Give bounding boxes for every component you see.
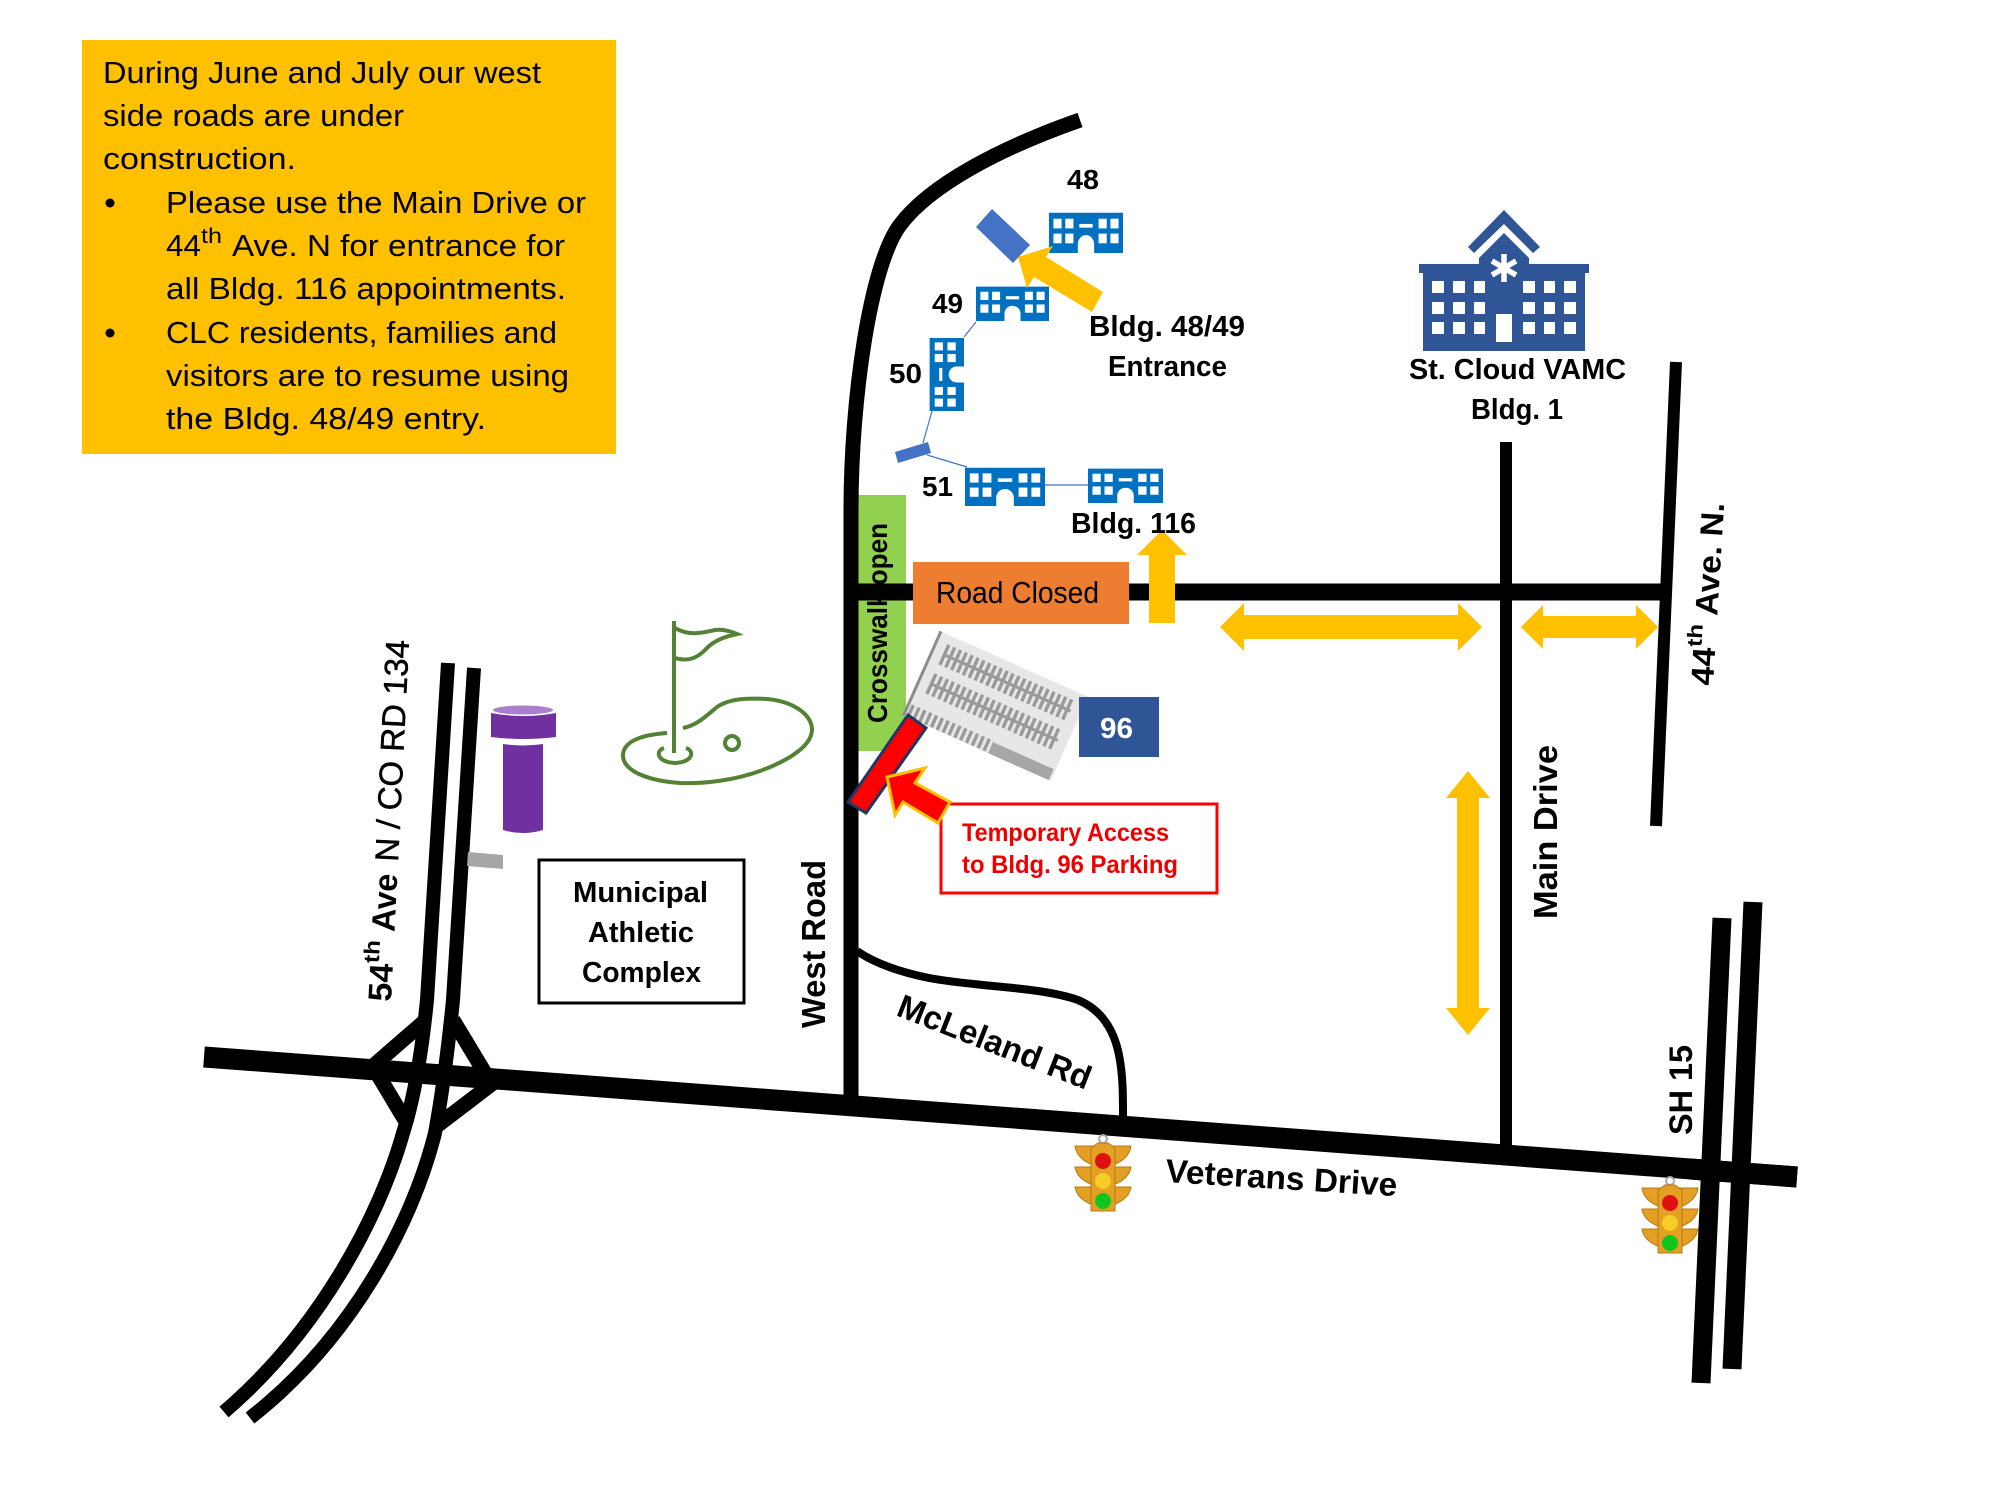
- label: 48: 48: [1067, 164, 1099, 195]
- arrow: Bldg. 48/49 entrance: [1018, 246, 1103, 312]
- label: Veterans Drive: Veterans Drive: [1165, 1152, 1398, 1203]
- box: Municipal Athletic Complex: [539, 860, 744, 1003]
- label: Bldg. 48/49 Entrance: Bldg. 48/49: [1089, 311, 1245, 343]
- road closed sign: Road Closed: [936, 575, 1099, 610]
- icon: building 116: [1088, 469, 1163, 503]
- temporary access road: [848, 715, 926, 813]
- icon: St. Cloud VAMC hospital: [1419, 210, 1589, 351]
- road: closed connector to 44th Ave: [851, 584, 1668, 600]
- label: McLeland Rd: McLeland Rd: [892, 987, 1097, 1096]
- panel: construction notice: Ave. N for entrance for: [232, 228, 565, 263]
- icon: golf course: [623, 621, 812, 783]
- gray access stub: [467, 852, 503, 869]
- panel: construction notice: CLC residents, families and: [166, 315, 557, 350]
- road: Veterans Drive: [204, 1057, 1797, 1177]
- road: 44th Ave N: [1656, 362, 1676, 826]
- label: 54th Ave N / CO RD 134: N / CO RD 134: [368, 639, 416, 863]
- label: 44th Ave. N.: 44: [1684, 646, 1722, 686]
- panel: construction notice: visitors are to resume using: [166, 358, 569, 393]
- icon: water tower: [491, 706, 556, 833]
- callout: temporary access to Bldg. 96 parking: Temporary Access: [962, 819, 1169, 847]
- road: SH 15: [1701, 902, 1753, 1383]
- box: Municipal Athletic Complex: Athletic: [588, 917, 694, 949]
- entrance marker: Bldg. 50/51: [895, 442, 931, 463]
- icon: building 51: [965, 468, 1045, 506]
- panel: construction notice: the Bldg. 48/49 entry.: [166, 401, 486, 436]
- label: 51: 51: [922, 471, 953, 502]
- label: Bldg. 48/49 Entrance: [1089, 311, 1245, 383]
- icon: traffic light on Veterans Drive: [1075, 1135, 1131, 1211]
- label: Main Drive: Main Drive: [1527, 745, 1564, 919]
- callout: temporary access to Bldg. 96 parking: to Bldg. 96 Parking: [962, 851, 1178, 879]
- road redraw: Veterans over SH 15: [1690, 1169, 1797, 1177]
- label: 54th Ave N / CO RD 134: [357, 639, 416, 1002]
- label: Bldg. 48/49 Entrance: Entrance: [1108, 351, 1227, 383]
- road: West Road: [851, 120, 1080, 1100]
- label: 54th Ave N / CO RD 134: Ave: [365, 873, 404, 932]
- entrance marker: Bldg. 48/49: [976, 209, 1030, 263]
- icon: traffic light at SH 15: [1642, 1177, 1698, 1253]
- panel: construction notice: During June and July our west: [103, 55, 541, 90]
- label: 49: 49: [932, 288, 963, 319]
- label: 50: 50: [889, 358, 922, 389]
- label: SH 15: SH 15: [1663, 1045, 1699, 1135]
- road: 54th Ave N / CO RD 134 interchange: [224, 663, 497, 1418]
- panel: construction notice: th: [201, 225, 222, 248]
- crosswalk open marker: Crosswalk open: [862, 523, 893, 723]
- icon: building 50: [930, 338, 964, 411]
- panel: construction notice: side roads are under: [103, 98, 404, 133]
- panel: construction notice: Please use the Main Drive or: [166, 185, 586, 220]
- box: Municipal Athletic Complex: Complex: [582, 957, 701, 989]
- label: 54th Ave N / CO RD 134: 54: [361, 962, 400, 1002]
- label: 44th Ave. N.: [1681, 501, 1731, 686]
- icon: building 49: [976, 287, 1049, 321]
- label: Bldg. 116: Bldg. 116: [1071, 508, 1196, 540]
- panel: construction notice: 44: [166, 228, 201, 263]
- connector lines between buildings: [923, 322, 1088, 485]
- panel: construction notice: construction.: [103, 141, 296, 176]
- label: West Road: West Road: [795, 860, 832, 1028]
- arrow: two-way to 44th Ave: [1521, 605, 1658, 649]
- label: 54th Ave N / CO RD 134: th: [359, 939, 385, 964]
- label: St. Cloud VAMC Bldg. 1: St. Cloud VAMC: [1409, 354, 1626, 386]
- crosswalk open marker: [858, 495, 906, 751]
- panel: construction notice: all Bldg. 116 appointments.: [166, 271, 566, 306]
- label: 44th Ave. N.: th: [1683, 623, 1708, 648]
- panel: construction notice: [82, 40, 616, 454]
- icon: building 48: [1049, 213, 1123, 253]
- arrow: two-way West of Main Drive: [1220, 603, 1482, 651]
- label: St. Cloud VAMC Bldg. 1: [1409, 354, 1626, 426]
- road: McLeland Rd: [857, 951, 1123, 1117]
- callout: temporary access to Bldg. 96 parking: [941, 804, 1217, 893]
- arrow: temporary access: [887, 768, 950, 823]
- label: building 96: 96: [1100, 713, 1133, 745]
- road closed sign: [913, 562, 1129, 624]
- arrow: two-way vertical: [1446, 771, 1490, 1035]
- label: St. Cloud VAMC Bldg. 1: Bldg. 1: [1471, 394, 1563, 426]
- label: 44th Ave. N.: Ave. N.: [1688, 502, 1731, 617]
- arrow: up to Bldg. 116: [1137, 530, 1187, 623]
- parking lot: Bldg. 96: [903, 631, 1088, 781]
- box: Municipal Athletic Complex: Municipal: [573, 877, 708, 909]
- label: building 96: [1079, 697, 1159, 757]
- road: Main Drive: [1500, 442, 1512, 1150]
